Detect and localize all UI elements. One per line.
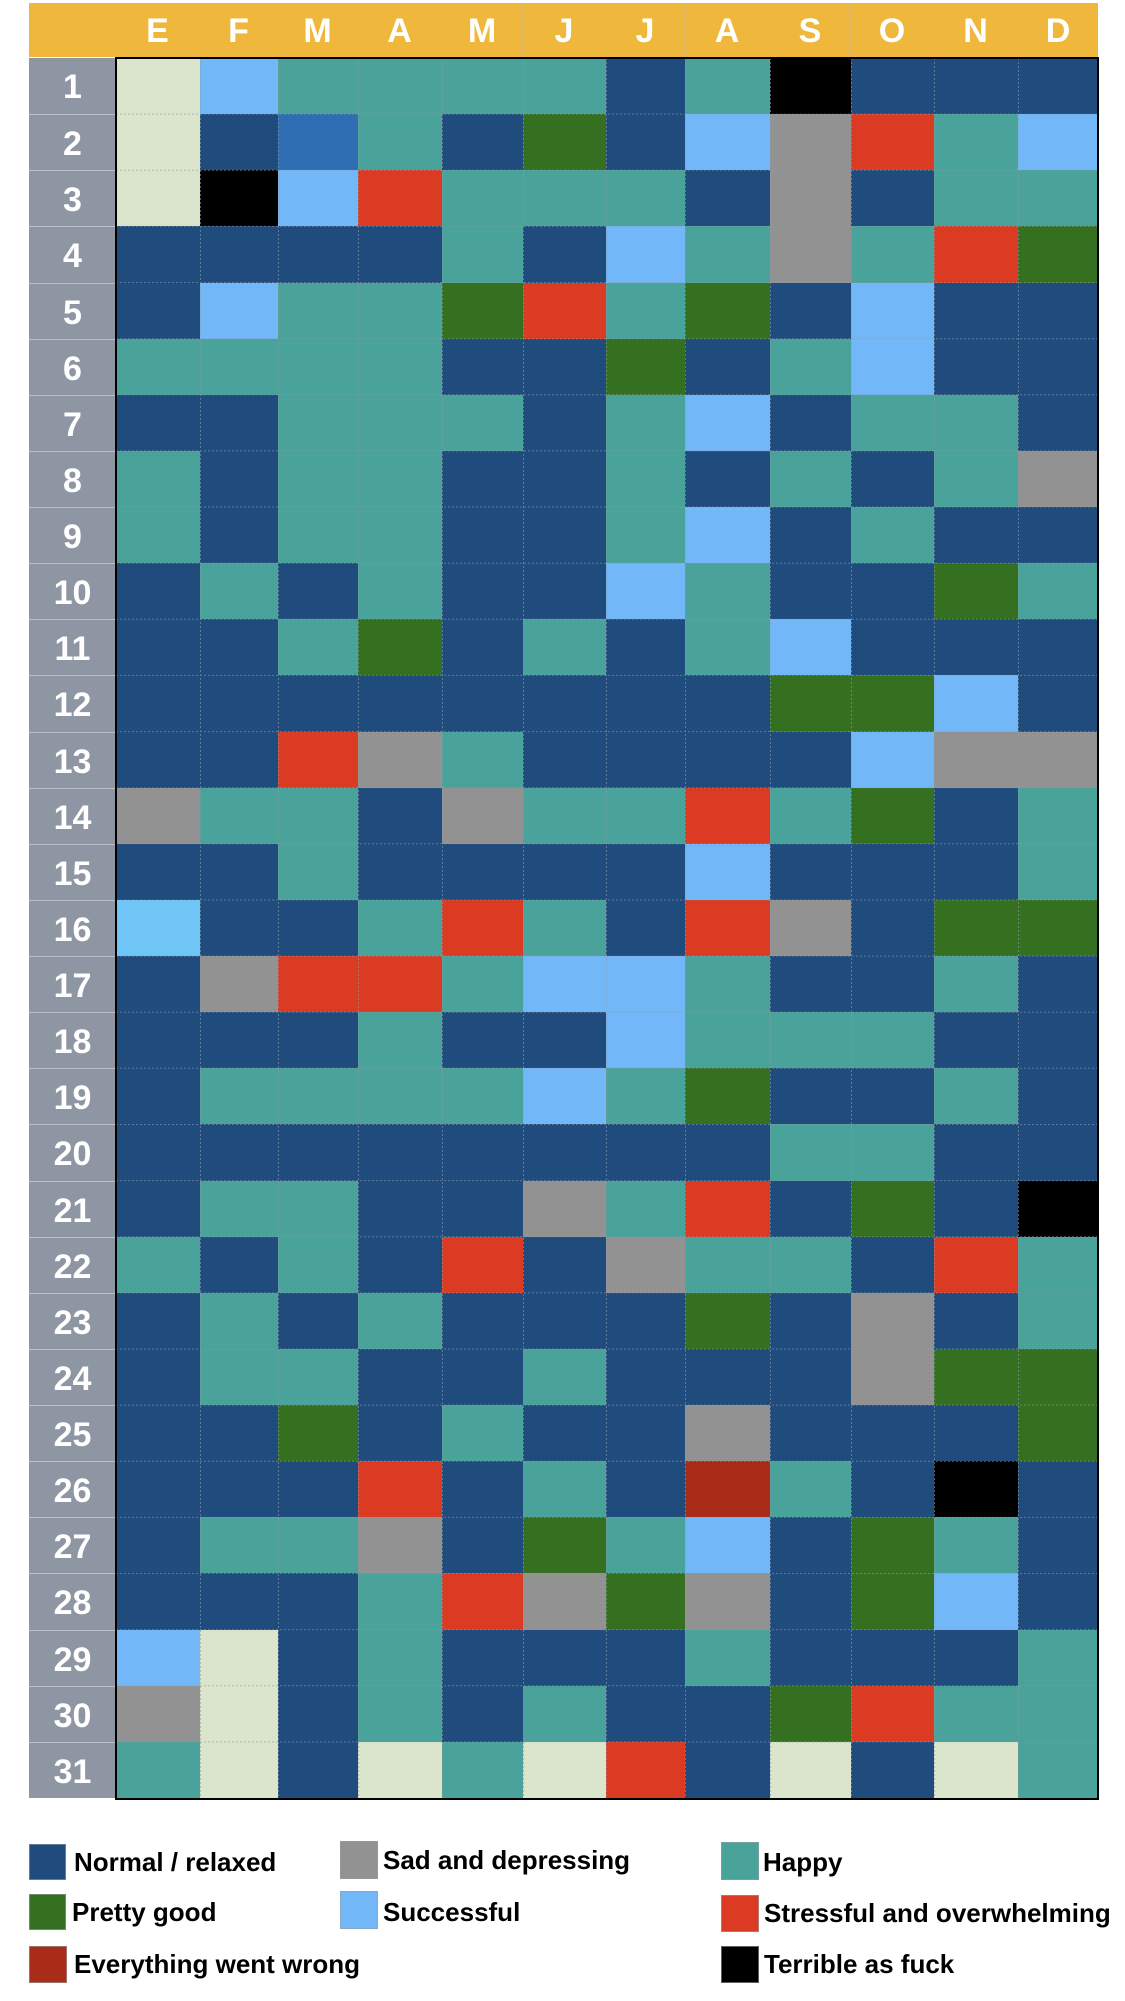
label: normal / relaxed: Normal / relaxed [74, 1847, 276, 1877]
day 30 row [117, 1686, 1097, 1742]
day number column: 2 [63, 125, 82, 163]
label: successful: Successful [383, 1897, 520, 1927]
swatch: successful [340, 1891, 378, 1929]
day 8 row [117, 451, 1097, 507]
day number column: 20 [54, 1135, 91, 1173]
month header row: F [228, 12, 249, 50]
month header row: A [387, 12, 412, 50]
day 28 row [117, 1573, 1097, 1630]
swatch: everything went wrong [29, 1946, 67, 1983]
swatch: terrible as fuck [721, 1946, 759, 1983]
day 27 row [117, 1517, 1097, 1573]
day number column: 10 [54, 574, 91, 612]
day number column [29, 58, 116, 1798]
day 5 row [117, 283, 1097, 339]
day number column: 1 [63, 68, 82, 106]
day 15 row [117, 844, 1097, 900]
day number column: 6 [63, 350, 82, 388]
day number column: 13 [54, 742, 91, 780]
day 10 row [117, 563, 1097, 619]
day 4 row [117, 226, 1097, 283]
day number column: 12 [54, 686, 91, 724]
day 12 row [117, 675, 1097, 732]
day number column: 26 [54, 1472, 91, 1510]
month header row: E [146, 12, 169, 50]
month header row: J [555, 12, 573, 50]
day 9 row [117, 507, 1097, 563]
day 22 row [117, 1237, 1097, 1293]
day number column: 4 [63, 237, 82, 275]
month header row: A [715, 12, 739, 50]
label: stressful and overwhelming: Stressful and overwhelming [764, 1898, 1111, 1928]
day 31 row [117, 1742, 1097, 1798]
month header row [29, 3, 1098, 57]
grid outline [115, 57, 1099, 1800]
day 24 row [117, 1349, 1097, 1405]
day number column: 7 [63, 406, 82, 444]
day number column: 21 [54, 1192, 91, 1230]
day number column: 31 [54, 1753, 91, 1791]
day 19 row [117, 1068, 1097, 1124]
day 17 row [117, 956, 1097, 1012]
day 20 row [117, 1124, 1097, 1181]
day 21 row [117, 1181, 1097, 1237]
month header row: M [468, 12, 496, 50]
label: everything went wrong: Everything went wrong [74, 1949, 360, 1979]
day 13 row [117, 732, 1097, 788]
day 14 row [117, 788, 1097, 844]
day 16 row [117, 900, 1097, 956]
day 29 row [117, 1630, 1097, 1686]
day number column: 16 [54, 911, 91, 949]
label: sad and depressing: Sad and depressing [383, 1845, 630, 1875]
day number column: 29 [54, 1640, 91, 1678]
day number column: 23 [54, 1304, 91, 1342]
day number column: 3 [63, 181, 82, 219]
day 25 row [117, 1405, 1097, 1461]
day number column: 18 [54, 1023, 91, 1061]
day number column: 30 [54, 1697, 91, 1735]
label: happy: Happy [763, 1847, 842, 1877]
mood calendar grid [117, 59, 1097, 1798]
day number column: 9 [63, 518, 82, 556]
label: pretty good: Pretty good [72, 1897, 216, 1927]
day 23 row [117, 1293, 1097, 1349]
day number column: 11 [55, 630, 90, 668]
legend [29, 1841, 1111, 1983]
day number column: 14 [54, 799, 91, 837]
day 6 row [117, 339, 1097, 395]
day number column: 17 [54, 967, 91, 1005]
swatch: normal / relaxed [29, 1844, 66, 1880]
month header row: N [963, 12, 988, 50]
month header row: M [303, 12, 332, 50]
day number column: 25 [54, 1416, 91, 1454]
day number column: 19 [54, 1079, 91, 1117]
day number column: 27 [54, 1528, 91, 1566]
month header row: O [879, 12, 905, 50]
day 11 row [117, 619, 1097, 675]
day number column: 28 [54, 1584, 91, 1622]
swatch: happy [721, 1842, 759, 1880]
day 2 row [117, 114, 1097, 170]
day 18 row [117, 1012, 1097, 1068]
month header row: D [1046, 12, 1070, 50]
month header row: S [799, 12, 821, 50]
day 26 row [117, 1461, 1097, 1517]
swatch: pretty good [29, 1894, 66, 1930]
swatch: sad and depressing [340, 1841, 378, 1879]
swatch: stressful and overwhelming [721, 1895, 759, 1932]
day number column: 15 [54, 855, 91, 893]
day number column: 22 [54, 1248, 91, 1286]
day 1 row [117, 59, 1097, 114]
day number column: 5 [63, 294, 82, 332]
day 3 row [117, 170, 1097, 226]
day 7 row [117, 395, 1097, 451]
label: terrible as fuck: Terrible as fuck [764, 1949, 954, 1979]
month header row: J [636, 12, 654, 50]
day number column: 8 [63, 462, 82, 500]
day number column: 24 [54, 1360, 91, 1398]
